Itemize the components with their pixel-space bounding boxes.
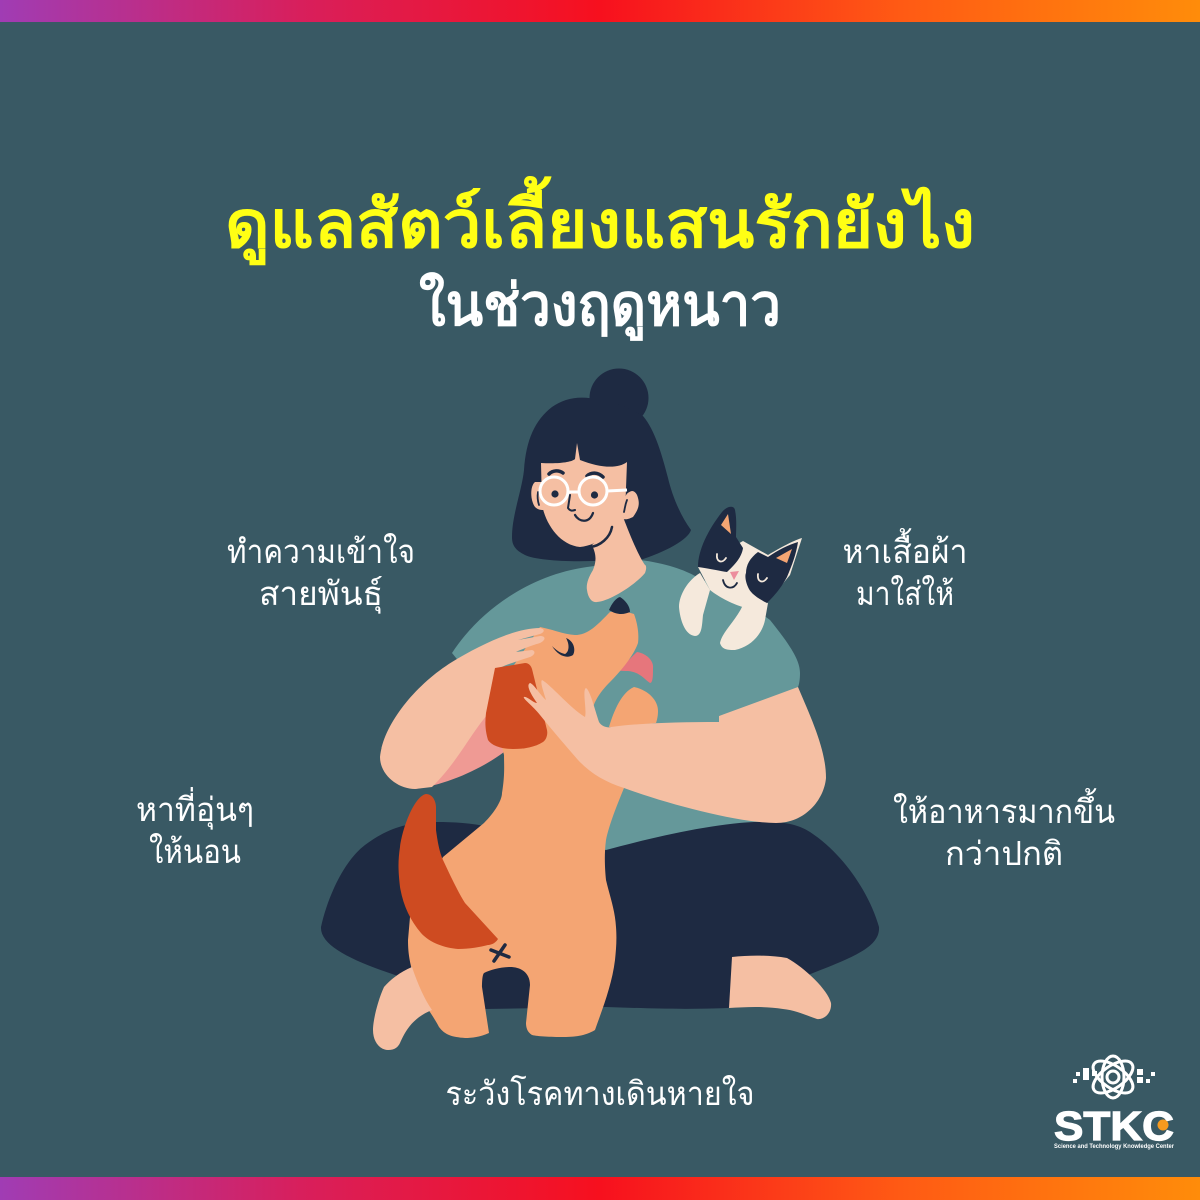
woman: left foot [373,967,432,1050]
label: understand the breed [227,533,415,614]
title [225,175,975,341]
label: warm place to sleep [136,787,254,870]
woman: left arm and hand [380,628,544,789]
logo: wordmark: STKC [1054,1103,1174,1149]
cat: right paw [720,603,768,650]
woman: facial features [538,471,627,547]
woman: legs [321,822,879,1009]
label: warm place to sleep: ให้นอน [149,833,241,870]
label: find clothes [842,528,968,612]
woman: right arm [524,680,826,823]
woman: glasses [540,477,627,505]
logo: tagline: Science and Technology Knowledge Center [1054,1143,1174,1150]
label: find clothes: มาใส่ให้ [856,575,954,612]
illustration: woman with dog and cat [321,368,879,1050]
cat: black patches [698,507,798,603]
dog: nose [609,597,630,614]
woman: face [541,443,627,547]
dog: paw [609,687,658,727]
woman: ears [531,482,639,519]
cat: ears inner [721,514,792,563]
label: respiratory disease: ระวังโรคทางเดินหายใจ [446,1075,754,1112]
cat: head white [698,538,802,607]
dog: tail [398,794,498,949]
woman: hair [512,368,691,561]
dog: ear [485,663,547,749]
dog: body and head [408,610,638,1038]
label: feed more [893,788,1115,872]
woman: neck [587,517,646,602]
dog: x mark [491,945,509,961]
cat: nose [730,571,739,580]
logo: orange dot [1158,1120,1168,1130]
label: feed more: กว่าปกติ [945,835,1063,872]
label: understand the breed: สายพันธุ์ [259,575,383,614]
title: ในช่วงฤดูหนาว [419,271,781,341]
logo: pixel squares [1073,1068,1155,1083]
logo: STKC [1054,1055,1174,1150]
label: warm place to sleep: หาที่อุ่นๆ [136,787,254,830]
bottom gradient bar [0,1177,1200,1200]
label: understand the breed: ทำความเข้าใจ [227,533,415,570]
label: feed more: ให้อาหารมากขึ้น [893,788,1115,830]
woman: under-arm shade [415,690,506,789]
woman: shirt [452,560,800,860]
cat: left paw [679,573,710,636]
cat: face lines [717,554,767,581]
dog: tongue [617,652,653,683]
cat [679,507,802,650]
label: find clothes: หาเสื้อผ้า [842,528,968,570]
cat: mouth [723,580,737,588]
top gradient bar [0,0,1200,22]
logo: atom icon [1088,1055,1138,1099]
woman: right foot [729,956,831,1019]
title: ดูแลสัตว์เลี้ยงแสนรักยังไง [225,175,975,266]
dog: eye [552,638,574,657]
